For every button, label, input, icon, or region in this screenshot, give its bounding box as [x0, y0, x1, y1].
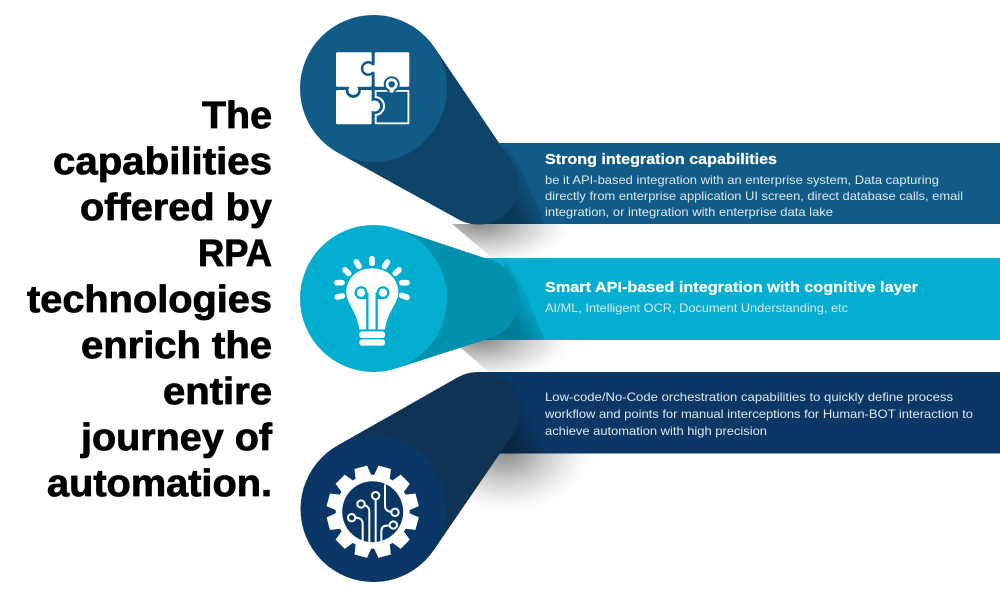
text: strong integration: Strong integration capabilities: [545, 151, 777, 168]
band shadow 3: [470, 454, 580, 504]
cap shadow 2: [478, 261, 545, 340]
text: strong integration: directly from enterprise application UI screen, direct database calls, email: [545, 189, 963, 203]
title: offered by: [80, 187, 272, 229]
title: RPA: [198, 233, 272, 275]
band 3: [478, 372, 1000, 454]
text: low-code: workflow and points for manual interceptions for Human-BOT interaction to: [544, 407, 973, 421]
panel: strong integration: [300, 15, 1000, 270]
title: [27, 95, 272, 505]
icon: puzzle: [336, 52, 409, 124]
title: technologies: [27, 279, 272, 321]
circle 2: [300, 225, 447, 372]
band shadow 1: [452, 224, 562, 258]
band shadow 2: [460, 340, 562, 372]
circle 1: [300, 15, 447, 162]
title: automation.: [47, 463, 272, 505]
tapered tube 2: [396, 229, 519, 368]
text: strong integration: be it API-based integration with an enterprise system, Data capturing: [545, 173, 939, 187]
title: journey of: [80, 417, 272, 459]
text: low-code: Low-code/No-Code orchestration capabilities to quickly define process: [545, 390, 953, 404]
text: smart API: [545, 279, 918, 315]
icon: gear with circuit: [326, 465, 419, 558]
panel: smart API: [300, 225, 1000, 386]
tapered tube 3: [338, 372, 519, 550]
title: capabilities: [53, 141, 272, 183]
title: enrich the: [81, 325, 272, 367]
title: The: [202, 95, 272, 137]
cap shadow 3: [478, 375, 545, 454]
circle 3: [300, 436, 446, 582]
text: smart API: AI/ML, Intelligent OCR, Document Understanding, etc: [545, 301, 848, 315]
text: low-code: [544, 390, 973, 438]
text: low-code: achieve automation with high precision: [545, 424, 767, 438]
title: entire: [163, 371, 272, 413]
icon: light bulb: [337, 259, 407, 346]
band 1: [478, 143, 1000, 224]
panel: low-code: [300, 372, 1000, 582]
text: smart API: Smart API-based integration with cognitive layer: [545, 279, 918, 296]
tapered tube 1: [338, 47, 518, 224]
text: strong integration: [545, 151, 963, 219]
text: strong integration: integration, or integration with enterprise data lake: [545, 205, 833, 219]
cap shadow 1: [478, 146, 545, 224]
band 2: [478, 258, 1000, 340]
